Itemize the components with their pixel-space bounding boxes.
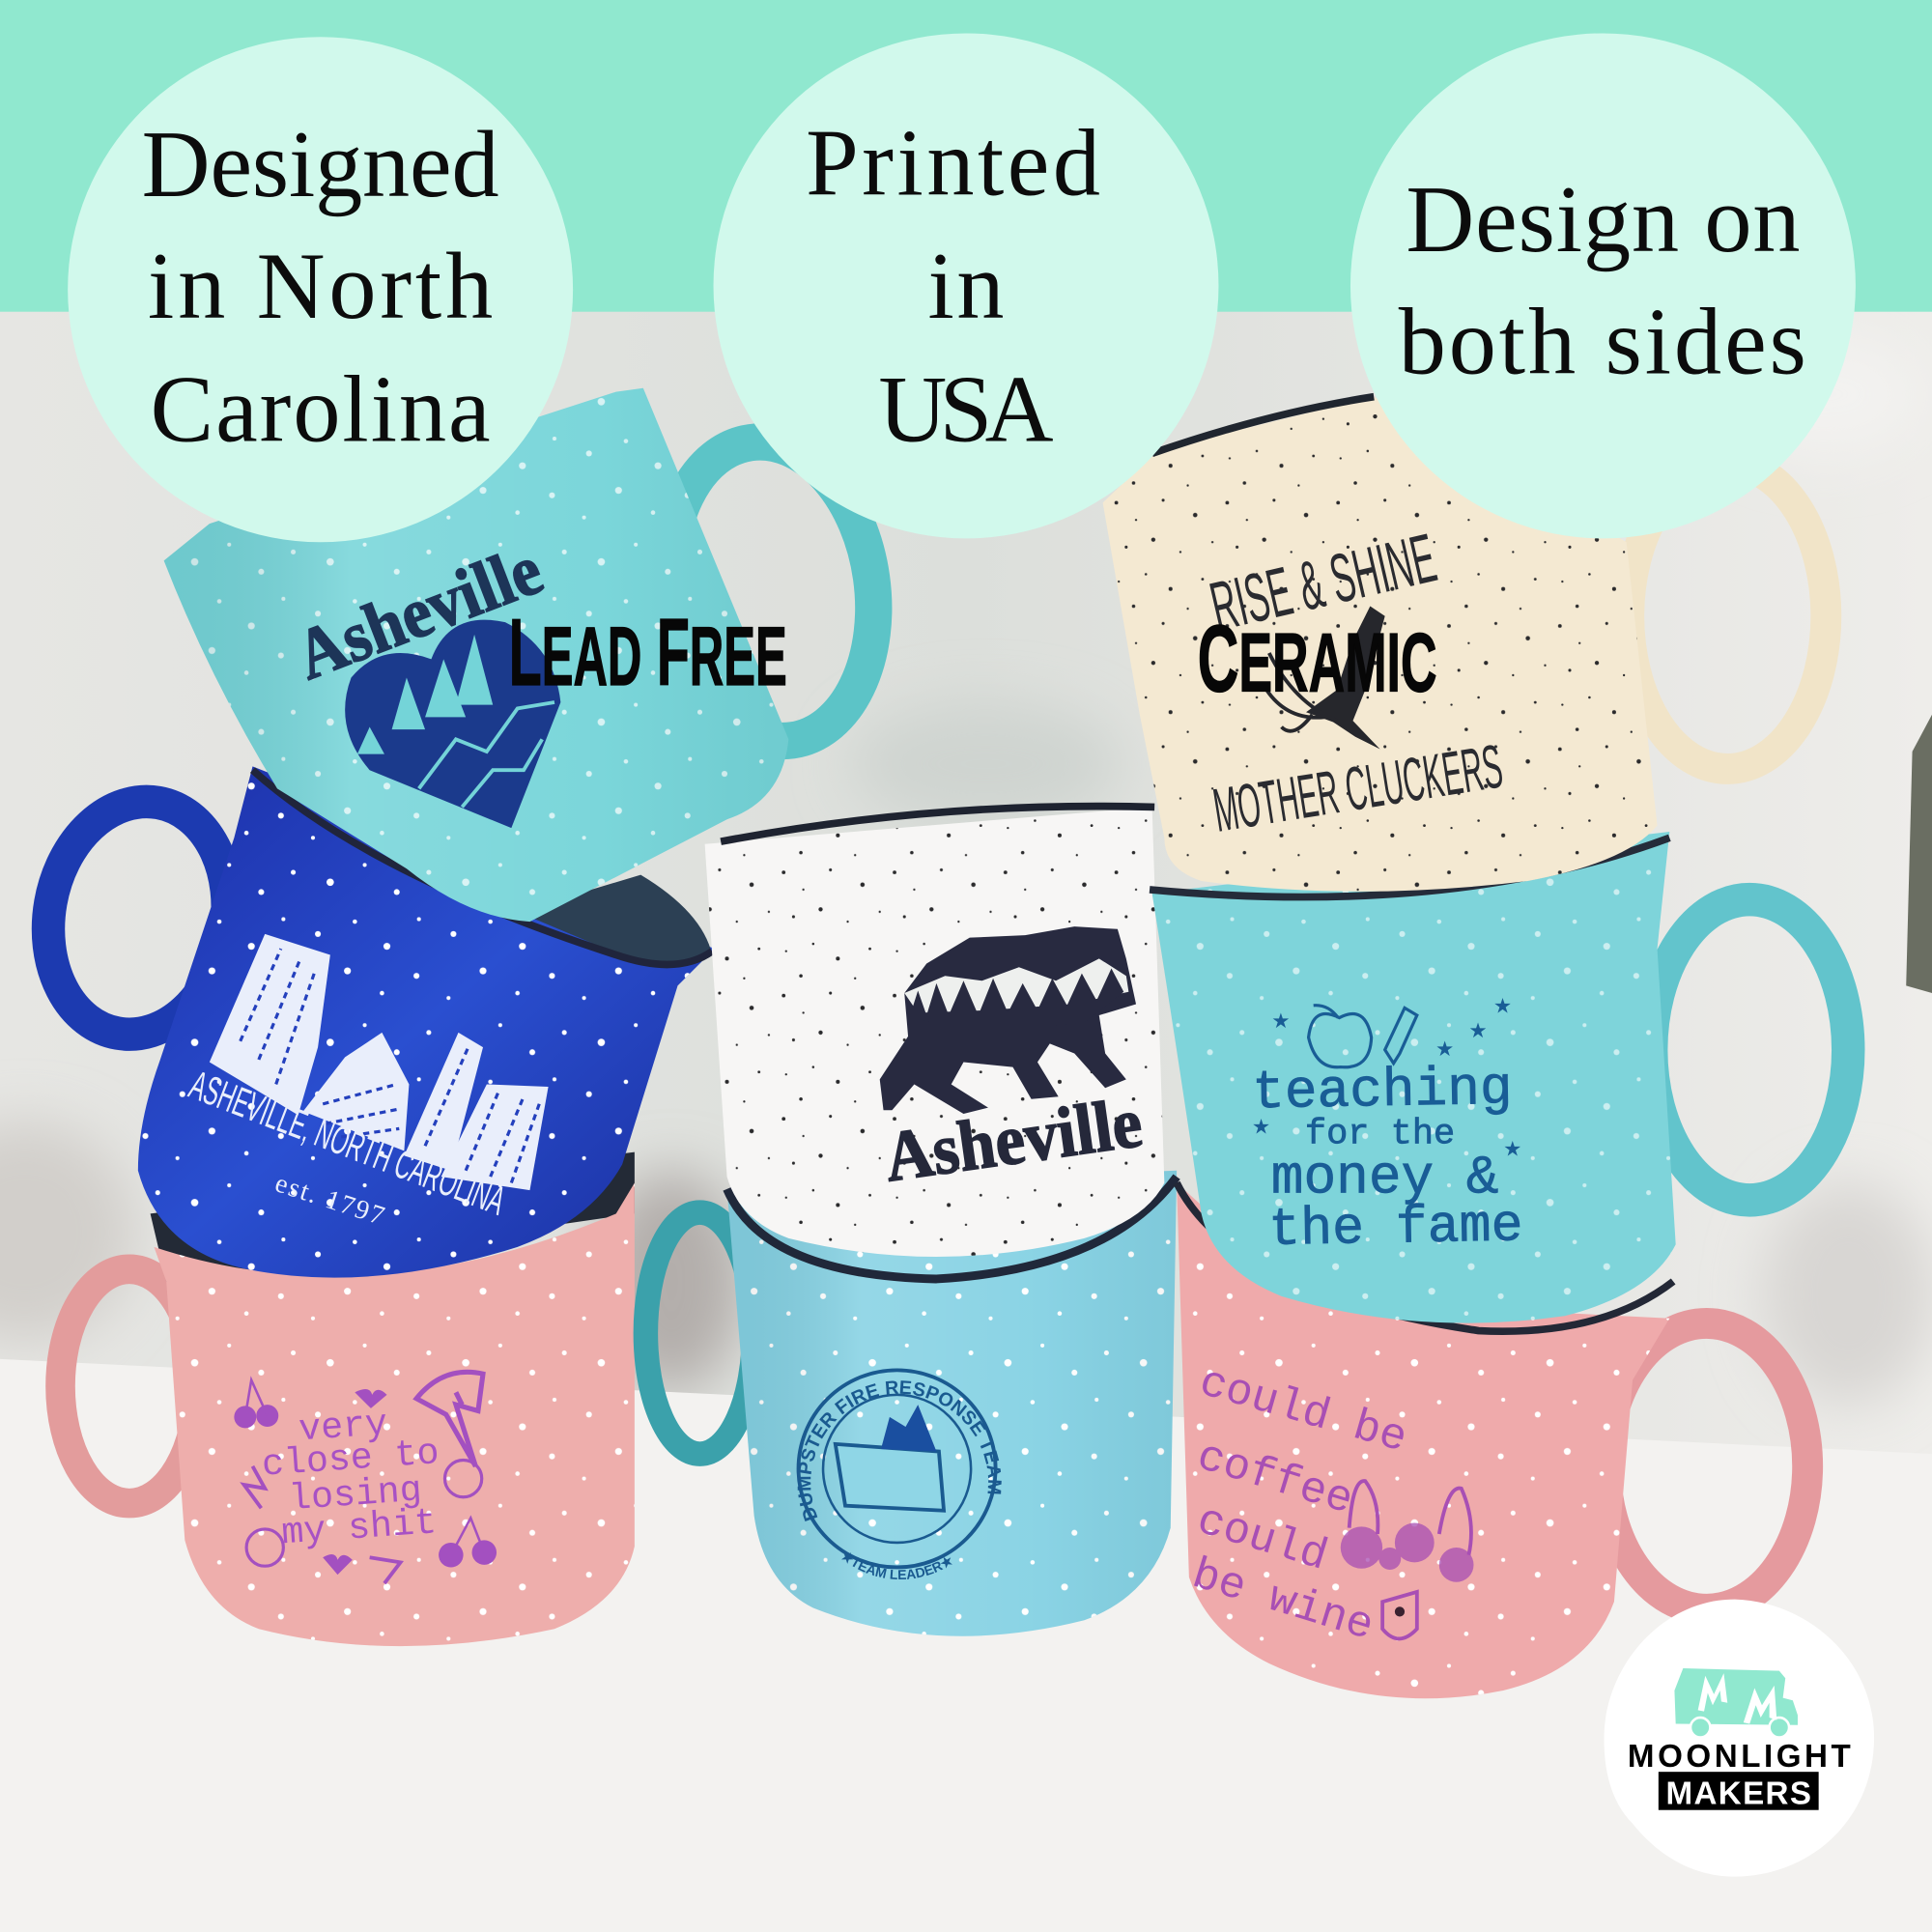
mug: pink left [60,1152,635,1646]
icon: llama with flowers [1341,1481,1474,1638]
mug text: very close to losing my shit: close to [261,1433,440,1487]
label: Ceramic: CERAMIC [1198,607,1437,712]
icon: rooster [1266,607,1385,750]
badge: dumpster fire response team [796,1368,1002,1579]
circle: designed in North Carolina: Carolina [151,357,491,463]
icon: stars: ★ [1271,1009,1291,1033]
mug: cream top right [1103,397,1826,892]
mug text: very close to losing my shit [261,1404,440,1554]
mug text: Rise & Shine: RISE & SHINE [1204,519,1443,645]
mug: teal bottom centre [634,1171,1180,1636]
mug rim [727,1177,1177,1279]
circle: design on both sides: Design on [1406,167,1801,272]
icon: stars: ★ [1493,993,1512,1017]
icon: stars: ★ [1435,1037,1454,1061]
circle: designed in North Carolina [68,37,573,542]
circle: printed in USA: USA [878,357,1054,463]
mug text: could be coffee could be wine: be wine [1186,1549,1379,1652]
badge curved text: DUMPSTER FIRE RESPONSE TEAM [798,1380,1002,1521]
icon: apple and pencil [1309,1006,1417,1067]
mug text: Mother Cluckers: MOTHER CLUCKERS [1208,731,1507,845]
photo background: wall [0,296,1932,1479]
mug text: could be coffee could be wine: could be [1194,1357,1412,1464]
mug text: teaching for the money & the fame: for the [1305,1115,1455,1155]
top mint band [0,0,1932,312]
mug rim [721,807,1154,841]
circle: design on both sides [1350,33,1856,538]
mug text: could be coffee could be wine: could [1191,1495,1333,1582]
mug rim [1177,1182,1673,1331]
mug rim [252,770,712,964]
mug text: Asheville: Asheville [286,530,553,696]
mug text: could be coffee could be wine: coffee [1191,1432,1358,1526]
logo wordmark: MOONLIGHT [1628,1739,1851,1775]
circle: design on both sides: both sides [1399,289,1806,394]
mug text: teaching for the money & the fame: teaching [1252,1058,1513,1123]
skyline illustration [210,934,549,1190]
wall texture blotches [0,332,1932,1405]
icons: cherries, hearts, bow, smileys [234,1372,497,1583]
icon: stars: ★ [1503,1136,1522,1160]
dark window frame [1906,715,1932,993]
mug text: est. 1797: est. 1797 [271,1168,389,1232]
mug: teal tilted top left [164,388,893,922]
circle: printed in USA: Printed [806,111,1100,216]
circle: designed in North Carolina: Designed [142,112,499,217]
logo makers box [1659,1772,1819,1810]
mug rim [1150,838,1669,897]
icon: stars: ★ [1468,1018,1488,1042]
mug: white centre [705,807,1164,1257]
mug text: Asheville: Asheville [880,1083,1147,1197]
mug text: teaching for the money & the fame [1252,1058,1523,1261]
logo: Moonlight Makers: MAKERS [1665,1776,1811,1811]
badge lower text: ★TEAM LEADER★ [841,1552,952,1579]
mug text: could be coffee could be wine [1186,1357,1412,1652]
mug text: teaching for the money & the fame: the fame [1268,1196,1523,1261]
icon: heart with trees and mountains [345,620,560,828]
icon: stars: ★ [1252,1114,1270,1138]
circle: printed in USA: in [927,234,1005,339]
mug interior [518,875,712,967]
mug text: very close to losing my shit: very [298,1404,389,1451]
icon: bear silhouette with forest [880,926,1136,1114]
mug: blue [30,766,715,1278]
mug text: very close to losing my shit: my shit [280,1502,438,1554]
circle: designed in North Carolina: in North [148,234,493,339]
mug: pink right [1177,1182,1807,1698]
shelf surface [0,1359,1932,1932]
mug text: Asheville, North Carolina: ASHEVILLE, NORTH CAROLINA [184,1063,511,1225]
label: Lead Free: LEAD FREE [509,600,787,705]
icon: stars [1252,993,1522,1160]
circle: printed in USA [714,33,1218,538]
mug: teal right [1150,832,1848,1323]
mug rim [1152,397,1374,453]
logo: Moonlight Makers [1605,1600,1874,1877]
mug interior [151,1152,635,1282]
mug text: very close to losing my shit: losing [288,1470,423,1520]
mug text: teaching for the money & the fame: money & [1271,1148,1499,1209]
logo van [1674,1668,1798,1737]
